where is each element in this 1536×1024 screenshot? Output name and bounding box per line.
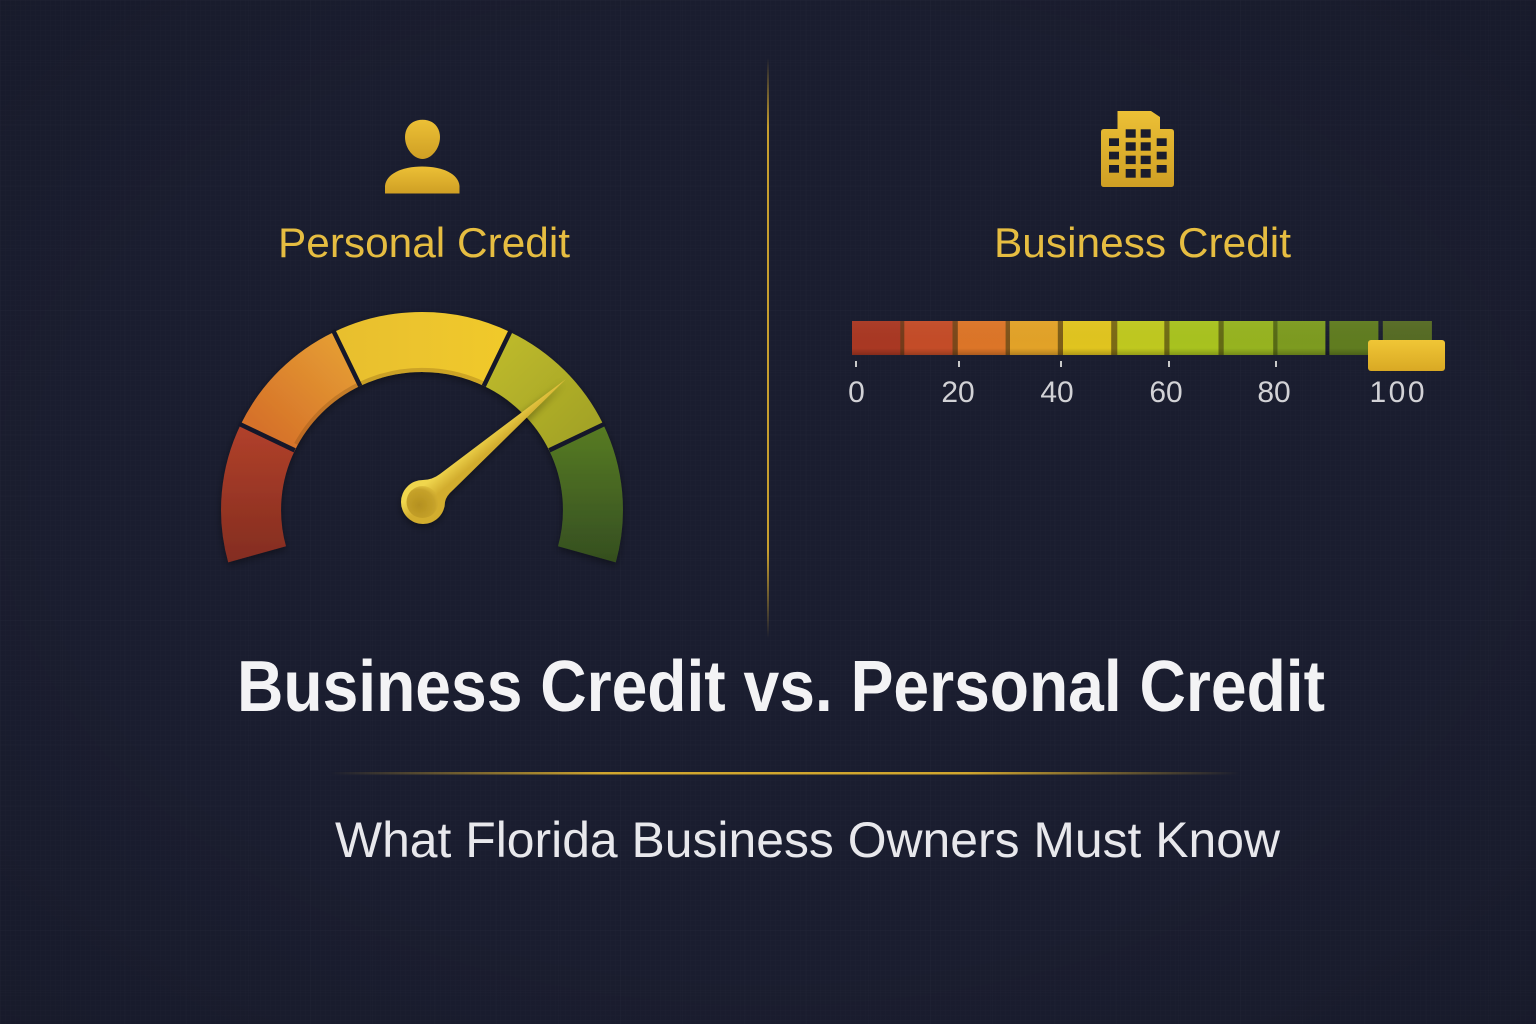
scale labels — [848, 376, 1424, 409]
scale labels: 20 — [941, 376, 975, 409]
scale labels: 80 — [1257, 376, 1291, 409]
chart: credit score gauge — [239, 330, 605, 554]
icon: person — [385, 120, 460, 194]
scale labels: 100 — [1370, 376, 1424, 409]
gauge needle — [401, 379, 566, 524]
bar connector shading — [852, 321, 1277, 355]
panel: personal credit — [239, 120, 605, 554]
tick marks — [855, 361, 1277, 367]
scale labels: 40 — [1040, 376, 1074, 409]
icon: building — [1101, 111, 1174, 187]
scale labels: 0 — [848, 376, 865, 409]
divider: horizontal — [330, 772, 1240, 774]
bar marker — [1368, 340, 1445, 371]
heading: business credit: Business Credit — [994, 219, 1291, 266]
scale labels: 60 — [1149, 376, 1183, 409]
heading: personal credit: Personal Credit — [278, 219, 570, 266]
bar segments — [852, 321, 1432, 355]
title: Business Credit vs. Personal Credit — [237, 647, 1325, 727]
chart: business credit bar — [848, 321, 1445, 409]
panel: business credit — [848, 111, 1445, 409]
subtitle: What Florida Business Owners Must Know — [335, 812, 1281, 868]
gauge segments — [251, 342, 593, 554]
divider: vertical — [767, 58, 769, 638]
gauge inner bevel — [296, 370, 484, 444]
